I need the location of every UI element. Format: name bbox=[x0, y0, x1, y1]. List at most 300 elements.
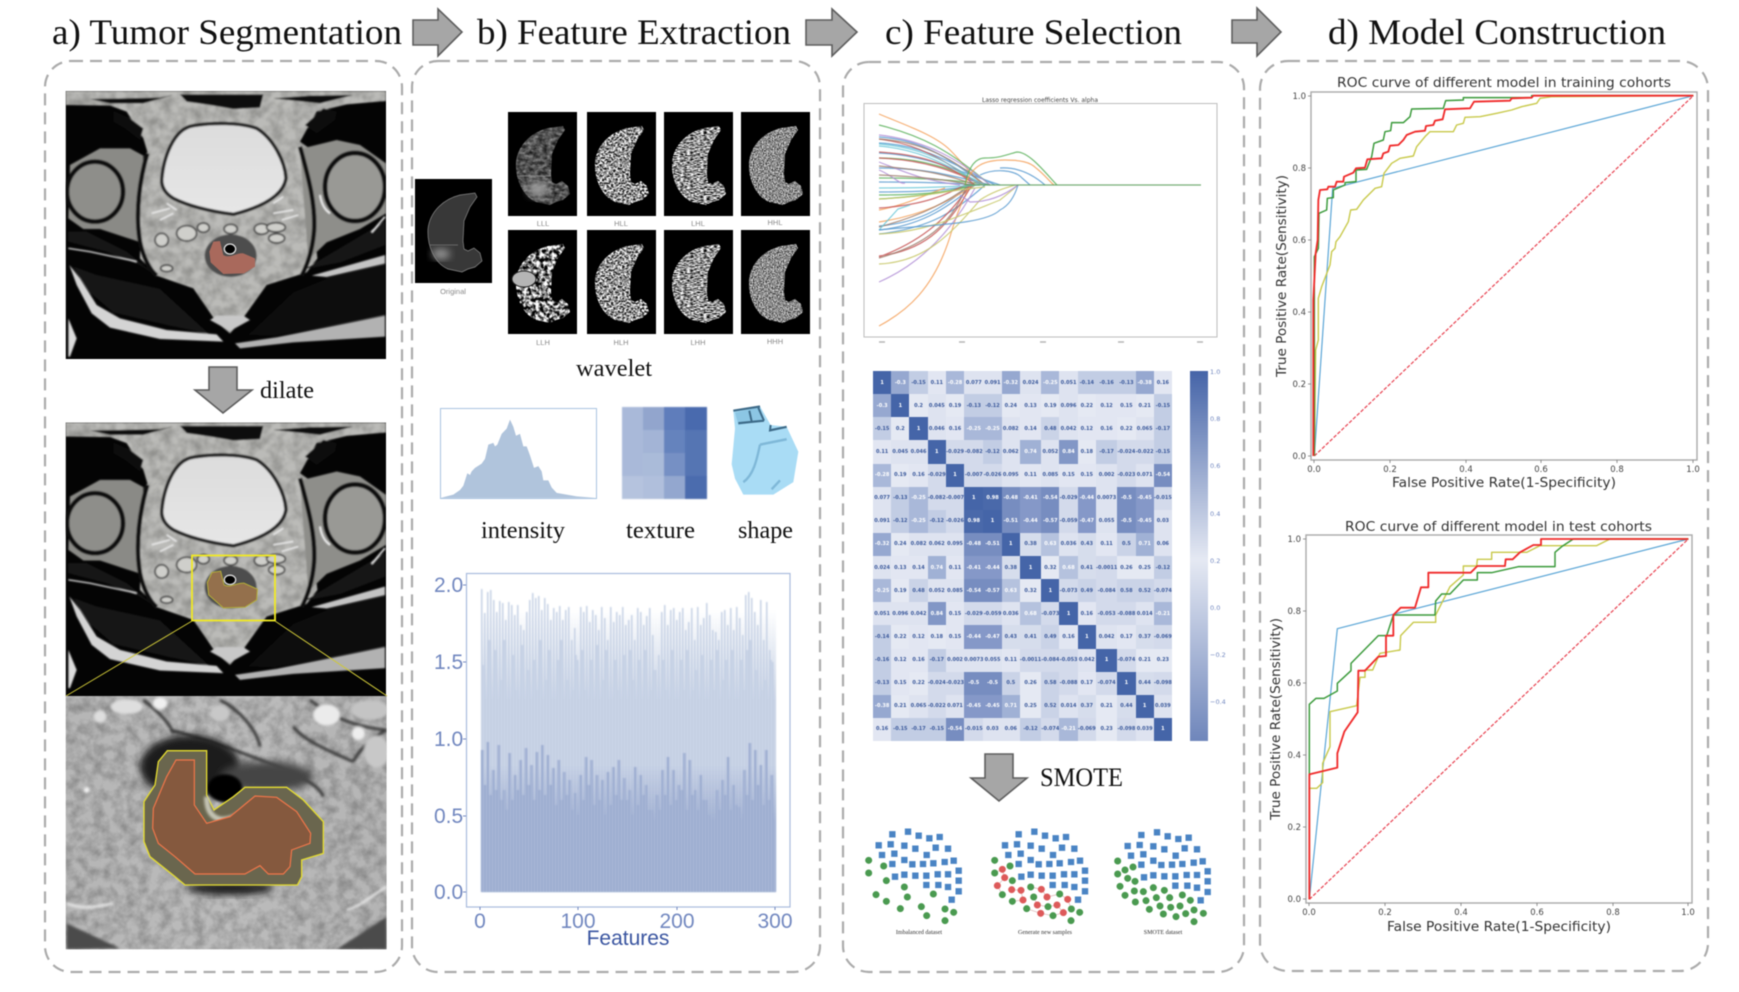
chart: ROC test cohorts: ROC curve of different model in test cohorts bbox=[1345, 519, 1652, 535]
chart: correlation heatmap: 0.2 bbox=[896, 426, 905, 432]
chart: SMOTE scatter panels: Generate new samples bbox=[1018, 930, 1073, 936]
chart: correlation heatmap: 0.055 bbox=[1099, 518, 1115, 524]
title: model construction: d) Model Construction bbox=[1328, 12, 1666, 52]
chart: lasso coefficient paths bbox=[864, 97, 1217, 342]
chart: correlation heatmap: 0.49 bbox=[1044, 634, 1057, 640]
chart: correlation heatmap: -0.44 bbox=[985, 565, 1000, 571]
chart: correlation heatmap: 0.095 bbox=[1003, 472, 1019, 478]
chart: correlation heatmap: -0.053 bbox=[1060, 657, 1078, 663]
title: feature selection: c) Feature Selection bbox=[885, 12, 1182, 52]
chart: ROC training cohorts: 0.2 bbox=[1292, 380, 1306, 390]
chart: correlation heatmap: 0.41 bbox=[1081, 565, 1093, 571]
chart: correlation heatmap: -0.3 bbox=[895, 380, 906, 386]
chart: correlation heatmap: -0.12 bbox=[893, 518, 908, 524]
label: dilate: dilate bbox=[260, 378, 314, 404]
chart: correlation heatmap: -0.5 bbox=[1121, 518, 1132, 524]
chart: correlation heatmap: -0.098 bbox=[1117, 726, 1135, 732]
chart: correlation heatmap: 0.096 bbox=[892, 611, 908, 617]
chart: correlation heatmap: -0.12 bbox=[985, 449, 1000, 455]
chart: correlation heatmap: 0.25 bbox=[1138, 565, 1151, 571]
chart: correlation heatmap: -0.023 bbox=[1117, 472, 1135, 478]
chart: correlation heatmap: 0.41 bbox=[1024, 634, 1037, 640]
axis labels: 200 bbox=[659, 910, 695, 933]
chart: correlation heatmap: -0.48 bbox=[967, 541, 981, 547]
chart: correlation heatmap: 0.095 bbox=[947, 541, 963, 547]
chart: ROC training cohorts: False Positive Rate(1-Specificity) bbox=[1392, 476, 1616, 491]
chart: correlation heatmap: 0.22 bbox=[912, 680, 925, 686]
chart: correlation heatmap: -0.029 bbox=[946, 449, 964, 455]
chart: correlation heatmap: 1 bbox=[972, 495, 976, 501]
chart: correlation heatmap: 0.32 bbox=[1024, 588, 1037, 594]
chart: correlation heatmap: 0.26 bbox=[1024, 680, 1037, 686]
image grid: wavelet decompositions: LLL bbox=[537, 219, 549, 228]
chart: correlation heatmap: 0.19 bbox=[949, 403, 961, 409]
chart: correlation heatmap: 0.002 bbox=[947, 657, 963, 663]
chart: ROC training cohorts: 0.0 bbox=[1307, 465, 1321, 475]
chart: correlation heatmap: -0.022 bbox=[928, 703, 946, 709]
title: feature extraction: b) Feature Extraction bbox=[477, 12, 791, 52]
chart: correlation heatmap: 1 bbox=[1125, 680, 1128, 686]
chart: correlation heatmap: 0.045 bbox=[892, 449, 908, 455]
chart: correlation heatmap: -0.015 bbox=[1154, 495, 1172, 501]
chart: correlation heatmap: -0.13 bbox=[967, 403, 981, 409]
axis labels: 0 bbox=[474, 910, 486, 933]
chart: correlation heatmap: 1 bbox=[1067, 611, 1070, 617]
chart: correlation heatmap: 0.11 bbox=[949, 565, 961, 571]
scatter: imbalanced dataset bbox=[869, 832, 959, 921]
chart: correlation heatmap: 0.13 bbox=[1024, 403, 1037, 409]
bars: upper light series bbox=[481, 589, 776, 892]
chart: correlation heatmap: -0.25 bbox=[1043, 380, 1058, 386]
chart: correlation heatmap: -0.45 bbox=[1137, 518, 1152, 524]
image grid: wavelet decompositions: LHL bbox=[691, 219, 705, 228]
chart: correlation heatmap: 0.06 bbox=[1005, 726, 1017, 732]
chart: correlation heatmap: -0.12 bbox=[1023, 726, 1038, 732]
chart: correlation heatmap: 0.065 bbox=[1137, 426, 1153, 432]
chart: correlation heatmap: 0.16 bbox=[876, 726, 888, 732]
image: MRI with tumor mask bbox=[66, 91, 386, 368]
chart: correlation heatmap: 0.38 bbox=[1024, 541, 1037, 547]
chart: heatmap colorbar: 0.4 bbox=[1210, 510, 1220, 518]
chart: correlation heatmap: 0.98 bbox=[968, 518, 980, 524]
chart: correlation heatmap: 0.24 bbox=[894, 541, 906, 547]
chart: correlation heatmap: -0.54 bbox=[967, 588, 981, 594]
chart: correlation heatmap: 1 bbox=[1161, 726, 1165, 732]
chart: correlation heatmap: 0.082 bbox=[1003, 426, 1019, 432]
chart: correlation heatmap: 0.38 bbox=[1005, 565, 1017, 571]
chart: correlation heatmap: 0.024 bbox=[1023, 380, 1038, 386]
chart: correlation heatmap: -0.16 bbox=[1099, 380, 1114, 386]
chart: correlation heatmap: -0.12 bbox=[985, 403, 1000, 409]
chart: correlation heatmap: 0.18 bbox=[1081, 449, 1093, 455]
chart: ROC training cohorts: 1.0 bbox=[1686, 465, 1700, 475]
arrow: c to d bbox=[1232, 8, 1281, 56]
chart: correlation heatmap: 0.051 bbox=[874, 611, 890, 617]
chart: correlation heatmap: -0.015 bbox=[965, 726, 983, 732]
chart: correlation heatmap: 0.082 bbox=[911, 541, 926, 547]
chart: correlation heatmap: -0.5 bbox=[987, 680, 998, 686]
chart: correlation heatmap: -0.074 bbox=[1117, 657, 1135, 663]
chart: correlation heatmap: 0.052 bbox=[1042, 449, 1058, 455]
axis labels: 2.0 bbox=[434, 574, 463, 597]
chart: correlation heatmap: 0.12 bbox=[1081, 426, 1093, 432]
chart: correlation heatmap: 1 bbox=[1143, 703, 1146, 709]
chart: correlation heatmap: 0.042 bbox=[1079, 657, 1095, 663]
chart: correlation heatmap: 0.077 bbox=[874, 495, 890, 501]
chart: correlation heatmap: -0.074 bbox=[1041, 726, 1059, 732]
chart: correlation heatmap: -0.41 bbox=[1023, 495, 1038, 501]
chart: correlation heatmap: 0.24 bbox=[1005, 403, 1017, 409]
chart: ROC test cohorts: 1.0 bbox=[1287, 535, 1301, 545]
chart: correlation heatmap: 0.32 bbox=[1044, 565, 1057, 571]
chart: correlation heatmap: 0.17 bbox=[1120, 634, 1133, 640]
chart: correlation heatmap: 0.68 bbox=[1024, 611, 1037, 617]
chart: correlation heatmap: -0.12 bbox=[930, 518, 944, 524]
label: intensity: intensity bbox=[481, 518, 565, 544]
chart: correlation heatmap: -0.053 bbox=[1098, 611, 1116, 617]
chart: correlation heatmap: 0.17 bbox=[1081, 680, 1093, 686]
chart: correlation heatmap: -0.15 bbox=[911, 380, 926, 386]
chart: correlation heatmap: 0.13 bbox=[894, 565, 906, 571]
chart: correlation heatmap: 0.21 bbox=[894, 703, 906, 709]
chart: correlation heatmap: 0.065 bbox=[911, 703, 926, 709]
chart: ROC test cohorts: 0.2 bbox=[1287, 823, 1301, 833]
chart: correlation heatmap: 0.48 bbox=[912, 588, 925, 594]
chart: correlation heatmap: -0.21 bbox=[1061, 726, 1076, 732]
chart: ROC test cohorts: False Positive Rate(1-Specificity) bbox=[1387, 920, 1611, 935]
chart: ROC training cohorts: 0.4 bbox=[1459, 465, 1473, 475]
chart: correlation heatmap: 0.042 bbox=[911, 611, 926, 617]
image grid: wavelet decompositions: HHH bbox=[767, 337, 783, 346]
chart: correlation heatmap: 0.71 bbox=[1005, 703, 1017, 709]
chart: correlation heatmap: 0.14 bbox=[1024, 426, 1037, 432]
title: tumor segmentation: a) Tumor Segmentation bbox=[52, 12, 402, 52]
chart: correlation heatmap: -0.029 bbox=[1060, 495, 1078, 501]
chart: correlation heatmap: -0.28 bbox=[875, 472, 889, 478]
axis labels: 0.5 bbox=[434, 805, 463, 828]
chart: heatmap colorbar: 0.0 bbox=[1210, 604, 1220, 612]
chart: correlation heatmap: -0.25 bbox=[911, 495, 926, 501]
chart: correlation heatmap: 0.002 bbox=[1099, 472, 1115, 478]
chart: correlation heatmap: -0.13 bbox=[893, 495, 908, 501]
chart: correlation heatmap: -0.026 bbox=[984, 472, 1001, 478]
chart: correlation heatmap: 0.19 bbox=[894, 588, 906, 594]
chart: correlation heatmap: 0.16 bbox=[1062, 634, 1075, 640]
image: original slice: Original bbox=[440, 287, 466, 296]
chart: correlation heatmap: 0.15 bbox=[949, 634, 961, 640]
chart: ROC training cohorts: ROC curve of different model in training cohorts bbox=[1337, 75, 1671, 91]
chart: ROC test cohorts: 0.8 bbox=[1606, 908, 1620, 918]
chart: correlation heatmap: 0.042 bbox=[1099, 634, 1115, 640]
chart: correlation heatmap: -0.28 bbox=[948, 380, 962, 386]
chart: correlation heatmap: -0.074 bbox=[1098, 680, 1116, 686]
chart: correlation heatmap: -0.25 bbox=[967, 426, 981, 432]
scatter: generated samples bbox=[995, 832, 1085, 921]
chart: SMOTE scatter panels: Imbalanced dataset bbox=[896, 930, 942, 936]
chart: correlation heatmap: 0.44 bbox=[1120, 703, 1133, 709]
chart: correlation heatmap: -0.17 bbox=[911, 726, 926, 732]
chart: correlation heatmap: -0.17 bbox=[1156, 426, 1170, 432]
image: enlarged tumor region bbox=[66, 696, 389, 949]
chart: correlation heatmap: 0.03 bbox=[986, 726, 999, 732]
arrow: a to b bbox=[413, 9, 462, 56]
arrow: SMOTE bbox=[971, 754, 1027, 801]
chart: correlation heatmap: 0.091 bbox=[985, 380, 1000, 386]
chart: correlation heatmap: 0.036 bbox=[1061, 541, 1076, 547]
chart: correlation heatmap: 1 bbox=[1049, 588, 1052, 594]
chart: correlation heatmap: 0.046 bbox=[929, 426, 945, 432]
chart: ROC test cohorts: 0.2 bbox=[1378, 908, 1392, 918]
chart: correlation heatmap: 0.085 bbox=[1042, 472, 1058, 478]
chart: correlation heatmap: 0.11 bbox=[876, 449, 888, 455]
chart: correlation heatmap: 0.84 bbox=[1062, 449, 1075, 455]
panel: tumor segmentation bbox=[45, 61, 402, 972]
chart: correlation heatmap: 0.16 bbox=[1157, 380, 1169, 386]
chart: correlation heatmap: -0.029 bbox=[928, 472, 946, 478]
chart: correlation heatmap: -0.024 bbox=[928, 680, 946, 686]
chart: correlation heatmap: -0.088 bbox=[1117, 611, 1135, 617]
chart: correlation heatmap: -0.51 bbox=[985, 541, 1000, 547]
chart: correlation heatmap: 0.085 bbox=[947, 588, 963, 594]
chart: ROC test cohorts: True Positive Rate(Sensitivity) bbox=[1269, 618, 1284, 821]
chart: correlation heatmap: 0.16 bbox=[1081, 611, 1093, 617]
chart: correlation heatmap: 0.0073 bbox=[964, 657, 983, 663]
chart: texture matrix bbox=[622, 407, 707, 499]
chart: correlation heatmap: -0.25 bbox=[985, 426, 1000, 432]
chart: correlation heatmap: -0.45 bbox=[1137, 495, 1152, 501]
chart: correlation heatmap: -0.15 bbox=[930, 726, 944, 732]
chart: correlation heatmap: 0.12 bbox=[894, 657, 906, 663]
chart: correlation heatmap: -0.084 bbox=[1041, 657, 1059, 663]
chart: correlation heatmap: -0.57 bbox=[985, 588, 1000, 594]
chart: correlation heatmap: 0.15 bbox=[1062, 472, 1075, 478]
chart: correlation heatmap: 0.37 bbox=[1138, 634, 1151, 640]
chart: correlation heatmap: -0.15 bbox=[875, 426, 889, 432]
axis labels: 1.5 bbox=[434, 651, 463, 674]
chart: correlation heatmap: 0.71 bbox=[1138, 541, 1151, 547]
scatter: SMOTE dataset bbox=[1118, 832, 1208, 922]
chart: lasso coefficient paths: Lasso regression coefficients Vs. alpha bbox=[982, 97, 1098, 104]
chart: correlation heatmap: 0.039 bbox=[1137, 726, 1153, 732]
chart: correlation heatmap: -0.026 bbox=[946, 518, 964, 524]
chart: correlation heatmap: 0.5 bbox=[1122, 541, 1131, 547]
chart: correlation heatmap: -0.13 bbox=[1119, 380, 1134, 386]
chart: correlation heatmap: 0.15 bbox=[894, 680, 906, 686]
chart: ROC training cohorts bbox=[1275, 75, 1700, 491]
chart: correlation heatmap: 0.16 bbox=[949, 426, 961, 432]
chart: correlation heatmap: -0.074 bbox=[1154, 588, 1172, 594]
chart: correlation heatmap: 0.21 bbox=[1100, 703, 1113, 709]
chart: correlation heatmap: 0.21 bbox=[1138, 657, 1151, 663]
chart: correlation heatmap: -0.44 bbox=[1023, 518, 1038, 524]
chart: correlation heatmap: 1 bbox=[1105, 657, 1108, 663]
chart: correlation heatmap: -0.029 bbox=[965, 611, 983, 617]
x-axis title: Features bbox=[587, 927, 669, 950]
chart: correlation heatmap: 0.22 bbox=[1081, 403, 1093, 409]
chart: SMOTE scatter panels bbox=[869, 832, 1208, 936]
chart: correlation heatmap: 0.15 bbox=[949, 611, 961, 617]
chart: correlation heatmap: 0.52 bbox=[1044, 703, 1057, 709]
chart: correlation heatmap: 0.37 bbox=[1081, 703, 1093, 709]
chart: correlation heatmap: 0.014 bbox=[1137, 611, 1153, 617]
chart: heatmap colorbar: 0.8 bbox=[1210, 415, 1220, 423]
chart: correlation heatmap: 0.071 bbox=[947, 703, 963, 709]
chart: correlation heatmap: 0.22 bbox=[894, 634, 906, 640]
image grid: wavelet decompositions: LHH bbox=[690, 338, 706, 347]
chart: correlation heatmap: 0.036 bbox=[1003, 611, 1019, 617]
arrow: b to c bbox=[806, 9, 857, 56]
chart: correlation heatmap: -0.54 bbox=[1043, 495, 1058, 501]
chart: correlation heatmap: -0.54 bbox=[948, 726, 962, 732]
chart: correlation heatmap: -0.5 bbox=[1121, 495, 1132, 501]
chart: intensity histogram bbox=[440, 408, 596, 498]
chart: correlation heatmap: -0.15 bbox=[1156, 449, 1170, 455]
chart: correlation heatmap: -0.21 bbox=[1156, 611, 1170, 617]
chart: correlation heatmap: -0.3 bbox=[877, 403, 888, 409]
chart: correlation heatmap: -0.007 bbox=[946, 495, 964, 501]
chart: correlation heatmap: 0.74 bbox=[1024, 449, 1037, 455]
chart: ROC training cohorts: 0.6 bbox=[1534, 465, 1548, 475]
chart: correlation heatmap: 1 bbox=[991, 518, 994, 524]
chart: correlation heatmap: 0.23 bbox=[1157, 657, 1169, 663]
chart: correlation heatmap: -0.14 bbox=[875, 634, 889, 640]
chart: correlation heatmap: -0.13 bbox=[875, 680, 889, 686]
chart: correlation heatmap bbox=[873, 371, 1172, 741]
chart: correlation heatmap: 0.43 bbox=[1005, 634, 1017, 640]
panel: model construction bbox=[1260, 61, 1708, 971]
chart: correlation heatmap: 0.11 bbox=[1100, 541, 1113, 547]
axis labels: 1.0 bbox=[434, 728, 463, 751]
chart: correlation heatmap: 0.16 bbox=[912, 657, 925, 663]
image grid: wavelet decompositions bbox=[508, 112, 810, 347]
chart: correlation heatmap: 0.045 bbox=[929, 403, 945, 409]
chart: correlation heatmap: 0.039 bbox=[1155, 703, 1171, 709]
chart: heatmap colorbar: 0.2 bbox=[1210, 557, 1220, 565]
chart: correlation heatmap: -0.57 bbox=[1043, 518, 1058, 524]
chart: correlation heatmap: -0.024 bbox=[1117, 449, 1135, 455]
chart: correlation heatmap: -0.12 bbox=[1156, 565, 1170, 571]
chart: correlation heatmap: 0.071 bbox=[1137, 472, 1153, 478]
chart: heatmap colorbar bbox=[1190, 368, 1226, 741]
chart: correlation heatmap: -0.47 bbox=[985, 634, 1000, 640]
chart: correlation heatmap: 0.11 bbox=[931, 380, 943, 386]
chart: ROC training cohorts: 0.0 bbox=[1292, 452, 1306, 462]
chart: correlation heatmap: 0.16 bbox=[912, 472, 925, 478]
chart: correlation heatmap: 1 bbox=[917, 426, 920, 432]
chart: correlation heatmap: 0.48 bbox=[1044, 426, 1057, 432]
chart: correlation heatmap: -0.14 bbox=[1080, 380, 1094, 386]
axis labels: 0.0 bbox=[434, 881, 463, 904]
chart: correlation heatmap: 1 bbox=[899, 403, 902, 409]
chart: correlation heatmap: 0.096 bbox=[1061, 403, 1076, 409]
chart: ROC test cohorts: 0.4 bbox=[1454, 908, 1468, 918]
chart: correlation heatmap: -0.069 bbox=[1154, 634, 1172, 640]
chart: correlation heatmap: -0.38 bbox=[875, 703, 889, 709]
chart: correlation heatmap: -0.0011 bbox=[1020, 657, 1041, 663]
chart: ROC test cohorts: 0.8 bbox=[1287, 607, 1301, 617]
chart: correlation heatmap: 0.5 bbox=[1006, 680, 1015, 686]
chart: correlation heatmap: 0.014 bbox=[1061, 703, 1076, 709]
image grid: wavelet decompositions: HHL bbox=[767, 218, 783, 227]
chart: heatmap colorbar: 0.6 bbox=[1210, 462, 1220, 470]
panel: feature selection bbox=[843, 62, 1244, 972]
chart: correlation heatmap: 0.18 bbox=[931, 634, 943, 640]
chart: correlation heatmap: 1 bbox=[1029, 565, 1032, 571]
chart: correlation heatmap: -0.098 bbox=[1154, 680, 1172, 686]
chart: ROC training cohorts: 0.8 bbox=[1610, 465, 1624, 475]
chart: correlation heatmap: -0.069 bbox=[1078, 726, 1096, 732]
chart: correlation heatmap: 0.11 bbox=[1005, 657, 1017, 663]
chart: ROC test cohorts: 0.4 bbox=[1287, 751, 1301, 761]
chart: correlation heatmap: 0.06 bbox=[1157, 541, 1169, 547]
chart: ROC training cohorts: 0.8 bbox=[1292, 164, 1306, 174]
chart: ROC test cohorts: 1.0 bbox=[1681, 908, 1695, 918]
axis labels bbox=[434, 574, 793, 933]
chart: heatmap colorbar: −0.2 bbox=[1210, 651, 1226, 659]
chart: correlation heatmap: 0.58 bbox=[1044, 680, 1057, 686]
chart: ROC training cohorts: 0.4 bbox=[1292, 308, 1306, 318]
chart: correlation heatmap: -0.25 bbox=[875, 588, 889, 594]
chart: correlation heatmap: 0.74 bbox=[931, 565, 943, 571]
chart: correlation heatmap: -0.48 bbox=[1004, 495, 1018, 501]
chart: correlation heatmap: 0.12 bbox=[912, 634, 925, 640]
chart: correlation heatmap: 0.042 bbox=[1061, 426, 1076, 432]
image grid: wavelet decompositions: LLH bbox=[536, 338, 550, 347]
chart: correlation heatmap: 1 bbox=[1009, 541, 1012, 547]
chart: heatmap colorbar: 1.0 bbox=[1210, 368, 1220, 376]
chart: correlation heatmap: 0.43 bbox=[1081, 541, 1093, 547]
chart: heatmap colorbar: −0.4 bbox=[1210, 698, 1226, 706]
chart: correlation heatmap: -0.088 bbox=[1060, 680, 1078, 686]
image: MRI with dilated mask and zoom box bbox=[66, 422, 387, 699]
chart: correlation heatmap: 0.03 bbox=[1157, 518, 1169, 524]
bars: lower dark series bbox=[481, 742, 776, 892]
icon: 3D tumor shape bbox=[732, 406, 798, 495]
label: shape: shape bbox=[738, 518, 793, 544]
chart: correlation heatmap: 0.0073 bbox=[1097, 495, 1116, 501]
chart: correlation heatmap: -0.15 bbox=[893, 726, 908, 732]
chart: correlation heatmap: 0.052 bbox=[929, 588, 945, 594]
chart: correlation heatmap: 0.11 bbox=[1024, 472, 1037, 478]
chart: correlation heatmap: -0.082 bbox=[928, 495, 946, 501]
chart: correlation heatmap: -0.073 bbox=[1060, 588, 1078, 594]
arrow: dilate bbox=[195, 367, 252, 413]
label: wavelet: wavelet bbox=[576, 356, 652, 382]
chart: correlation heatmap: -0.41 bbox=[967, 565, 981, 571]
chart: correlation heatmap: -0.073 bbox=[1041, 611, 1059, 617]
chart: correlation heatmap: 0.062 bbox=[1003, 449, 1019, 455]
chart: correlation heatmap: -0.47 bbox=[1080, 518, 1094, 524]
chart: correlation heatmap: -0.5 bbox=[968, 680, 979, 686]
chart: correlation heatmap: -0.25 bbox=[911, 518, 926, 524]
chart: SMOTE scatter panels: SMOTE dataset bbox=[1144, 930, 1183, 936]
chart: correlation heatmap: 0.22 bbox=[1120, 426, 1133, 432]
chart: correlation heatmap: 0.21 bbox=[1138, 403, 1151, 409]
image grid: wavelet decompositions: HLH bbox=[613, 338, 629, 347]
chart: correlation heatmap: 1 bbox=[935, 449, 939, 455]
chart: correlation heatmap: -0.059 bbox=[1060, 518, 1078, 524]
chart: correlation heatmap: 0.84 bbox=[931, 611, 943, 617]
chart: correlation heatmap: 0.49 bbox=[1081, 588, 1093, 594]
chart: correlation heatmap: 0.055 bbox=[985, 657, 1000, 663]
chart: correlation heatmap: -0.17 bbox=[1099, 449, 1114, 455]
label: texture: texture bbox=[626, 518, 695, 544]
chart: ROC training cohorts: 0.2 bbox=[1383, 465, 1397, 475]
chart: correlation heatmap: 0.19 bbox=[894, 472, 906, 478]
chart: correlation heatmap: 1 bbox=[1085, 634, 1089, 640]
chart: correlation heatmap: 0.63 bbox=[1044, 541, 1057, 547]
chart: correlation heatmap: 0.062 bbox=[929, 541, 945, 547]
